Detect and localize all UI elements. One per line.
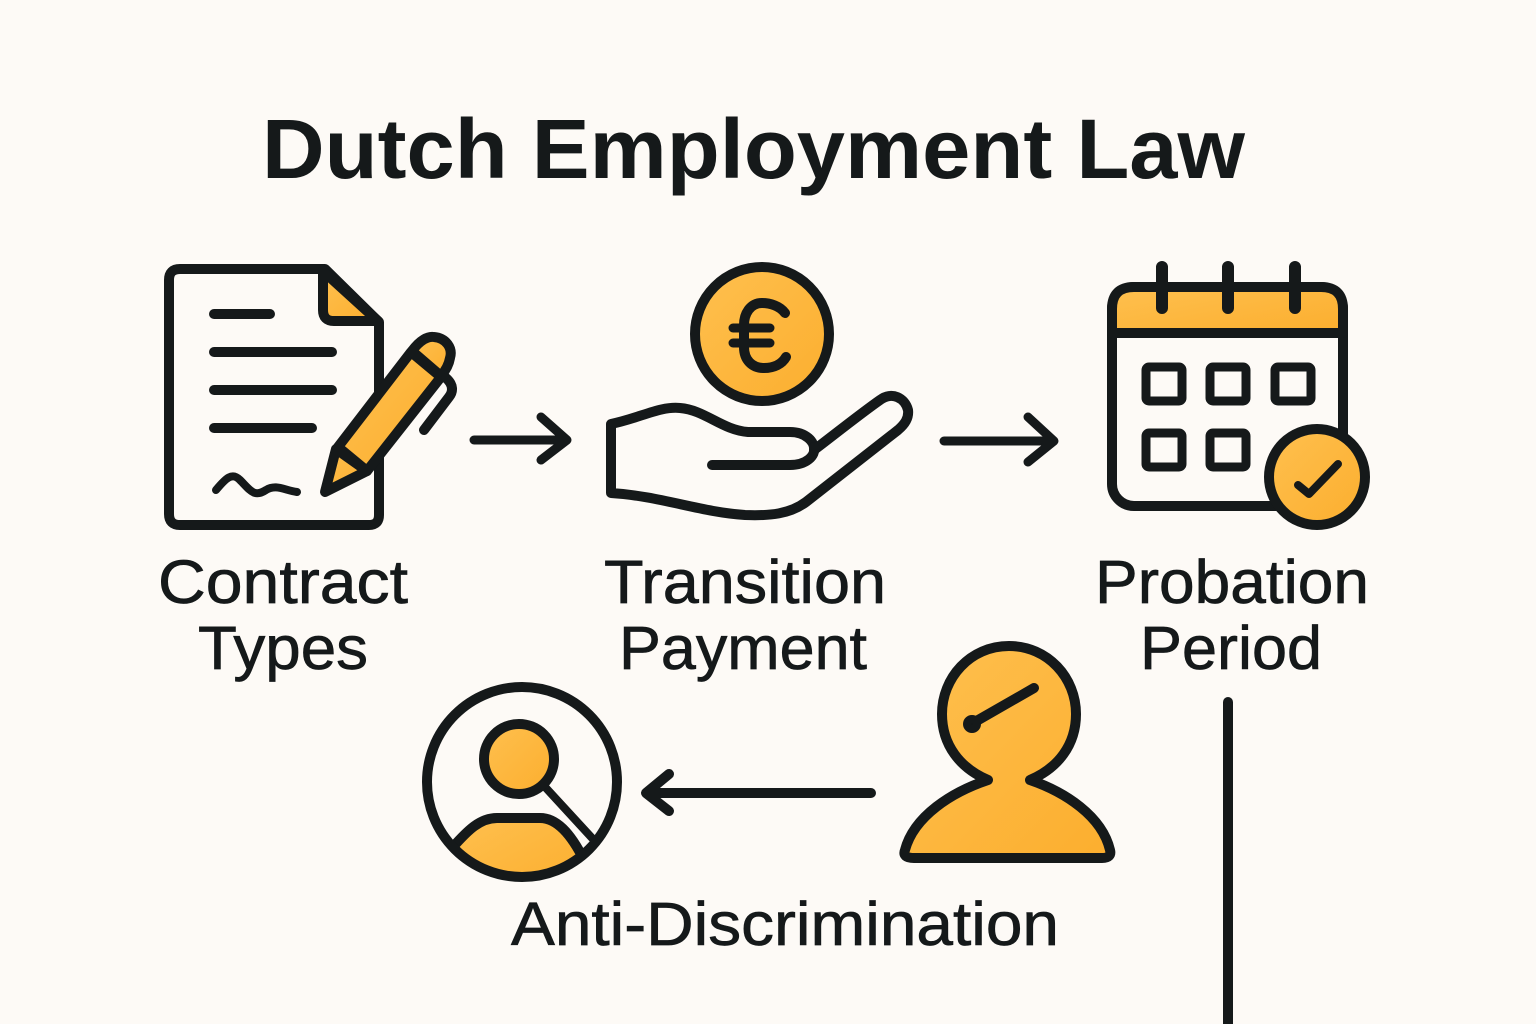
label: probation period: Period	[1140, 614, 1322, 682]
label: transition payment	[604, 548, 886, 682]
title: Dutch Employment Law	[262, 102, 1246, 196]
icon: calendar with check badge	[1112, 267, 1365, 525]
arrow: payment to probation	[944, 417, 1054, 462]
arrow: contract to payment	[474, 417, 567, 460]
label: anti-discrimination: Anti-Discrimination	[511, 890, 1059, 958]
icon: person under magnifier in circle	[427, 687, 617, 890]
label: contract types: Types	[198, 614, 368, 682]
icon: contract document with pen	[169, 269, 452, 525]
label: probation period: Probation	[1095, 548, 1369, 616]
label: transition payment: Transition	[604, 548, 886, 616]
icon: hand holding euro coin	[611, 267, 908, 515]
label: contract types: Contract	[158, 548, 408, 616]
icon: person silhouette	[904, 646, 1110, 858]
label: transition payment: Payment	[619, 614, 867, 682]
arrow: person to anti-discrimination	[646, 774, 871, 811]
vertical line	[1223, 702, 1233, 1024]
label: contract types	[158, 548, 408, 682]
label: probation period	[1095, 548, 1369, 682]
